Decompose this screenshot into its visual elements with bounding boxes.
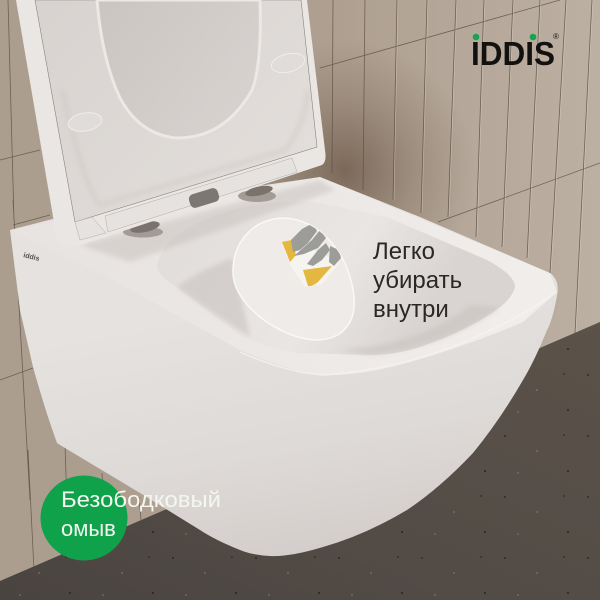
sponge foam: [285, 250, 340, 287]
hinge right: [238, 184, 276, 202]
green circle: [40, 476, 128, 560]
toilet body: [10, 177, 558, 556]
bowl interior shading: [177, 258, 500, 355]
IDDIS logo: IDDIS: [471, 35, 555, 72]
logo green dots: [473, 34, 536, 40]
seat opening: [97, 0, 260, 138]
gloved hand: [291, 223, 341, 266]
IDDIS logo: ®: [553, 32, 559, 41]
bumper right: [269, 50, 307, 76]
sponge yellow top: [282, 240, 296, 262]
toilet top rim surface: [10, 177, 557, 375]
background: speckled floor: [0, 322, 600, 600]
raised toilet seat lid: [16, 0, 326, 247]
lid inner shading: [62, 90, 308, 205]
toilet bowl: [10, 177, 558, 556]
magnifier circle: [233, 218, 354, 340]
brand mark on bowl: iddis: [23, 252, 40, 263]
bumper left: [67, 110, 103, 134]
badge text: омыв: [61, 516, 116, 541]
callout text: внутри: [373, 296, 449, 323]
lid lower lip: [75, 158, 297, 240]
callout: magnified bowl detail: [233, 218, 354, 340]
hinge left: [123, 219, 163, 238]
badge text: Безободковый: [61, 487, 221, 512]
badge text: [61, 487, 221, 541]
callout text: Легко: [373, 238, 435, 265]
magnified contents: [282, 223, 341, 287]
lid inner panel: [35, 0, 317, 222]
badge: rimless flush: [40, 476, 221, 560]
inner bowl: [157, 201, 515, 355]
rim shadow under lid: [80, 180, 335, 262]
callout text: [373, 238, 462, 323]
front edge highlight: [240, 292, 556, 375]
release button: [188, 187, 220, 209]
sponge yellow bottom: [303, 266, 332, 286]
callout text: убирать: [373, 267, 462, 294]
lid outer shape: [16, 0, 326, 247]
